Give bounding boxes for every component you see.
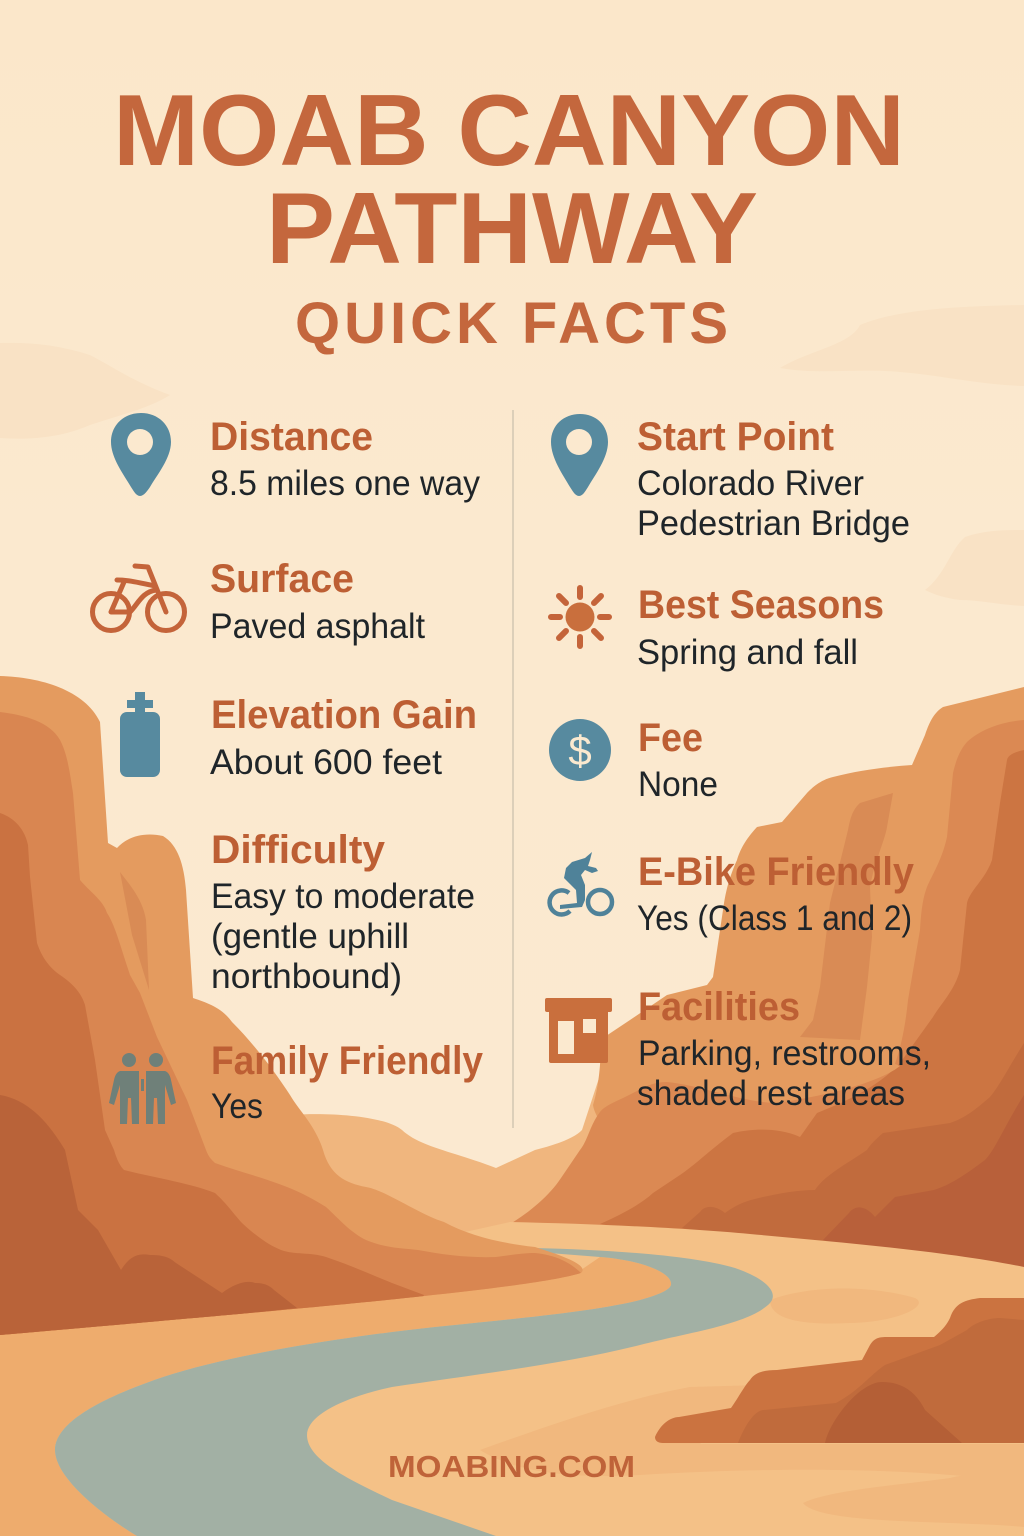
title: MOAB CANYON [113,75,905,187]
fact: start point: Colorado River [637,464,864,503]
title [113,75,905,285]
canyon illustration: right wall [510,687,1024,1290]
clouds [0,305,1024,606]
icon: bicycle [92,566,184,630]
fact: difficulty [211,828,475,996]
fact: facilities: shaded rest areas [637,1074,905,1113]
fact: best seasons: Best Seasons [638,583,884,627]
ground: near bank [0,1257,671,1536]
fact: fee: Fee [638,716,703,760]
canyon illustration: left wall [0,676,583,1340]
icon: location pin [551,414,608,496]
fact: start point: Pedestrian Bridge [637,504,910,543]
fact: family friendly: Yes [211,1087,263,1126]
fact: fee [638,716,718,804]
icon: dollar coin: $ [568,727,592,774]
icon: two people [109,1053,176,1124]
fact: distance [210,415,480,503]
fact: surface: Surface [210,557,354,601]
subtitle: QUICK FACTS [295,291,728,356]
river [55,1248,773,1536]
fact: facilities: Parking, restrooms, [638,1034,931,1073]
icon: dollar coin [549,719,611,781]
fact: start point [637,415,910,543]
fact: family friendly: Family Friendly [211,1039,484,1083]
title: PATHWAY [266,173,758,285]
fact: facilities [637,985,931,1113]
panel: left facts column [92,413,484,1126]
fact: best seasons: Spring and fall [637,633,858,672]
icon: location pin [111,413,171,496]
fact: surface: Paved asphalt [210,607,425,646]
icon: sun [551,588,609,646]
fact: e-bike friendly [637,850,915,938]
fact: family friendly [211,1039,484,1126]
foreground rock formation [655,1298,1024,1443]
icon: e-bike rider [550,852,612,914]
fact: difficulty: northbound) [211,957,402,996]
fact: elevation gain: Elevation Gain [211,693,477,737]
fact: difficulty: (gentle uphill [211,917,409,956]
icon: facility building [545,998,612,1063]
fact: elevation gain [210,693,477,782]
ground: sandy path [0,1222,1024,1536]
fact: best seasons [637,583,884,672]
fact: distance: Distance [210,415,373,459]
fact: e-bike friendly: Yes (Class 1 and 2) [637,899,912,938]
panel: right facts column [545,414,931,1113]
fact: facilities: Facilities [638,985,800,1029]
column divider [512,410,514,1128]
canyon illustration: far wall [290,1075,640,1240]
fact: elevation gain: About 600 feet [210,743,442,782]
fact: surface [210,557,425,646]
fact: start point: Start Point [637,415,834,459]
footer website: MOABING.COM [388,1449,635,1484]
fact: distance: 8.5 miles one way [210,464,480,503]
ground: sand shadow patches [480,1288,1024,1527]
fact: difficulty: Easy to moderate [211,877,475,916]
icon: water bottle [120,692,160,777]
fact: e-bike friendly: E-Bike Friendly [638,850,915,894]
fact: fee: None [638,765,718,804]
fact: difficulty: Difficulty [211,828,386,872]
